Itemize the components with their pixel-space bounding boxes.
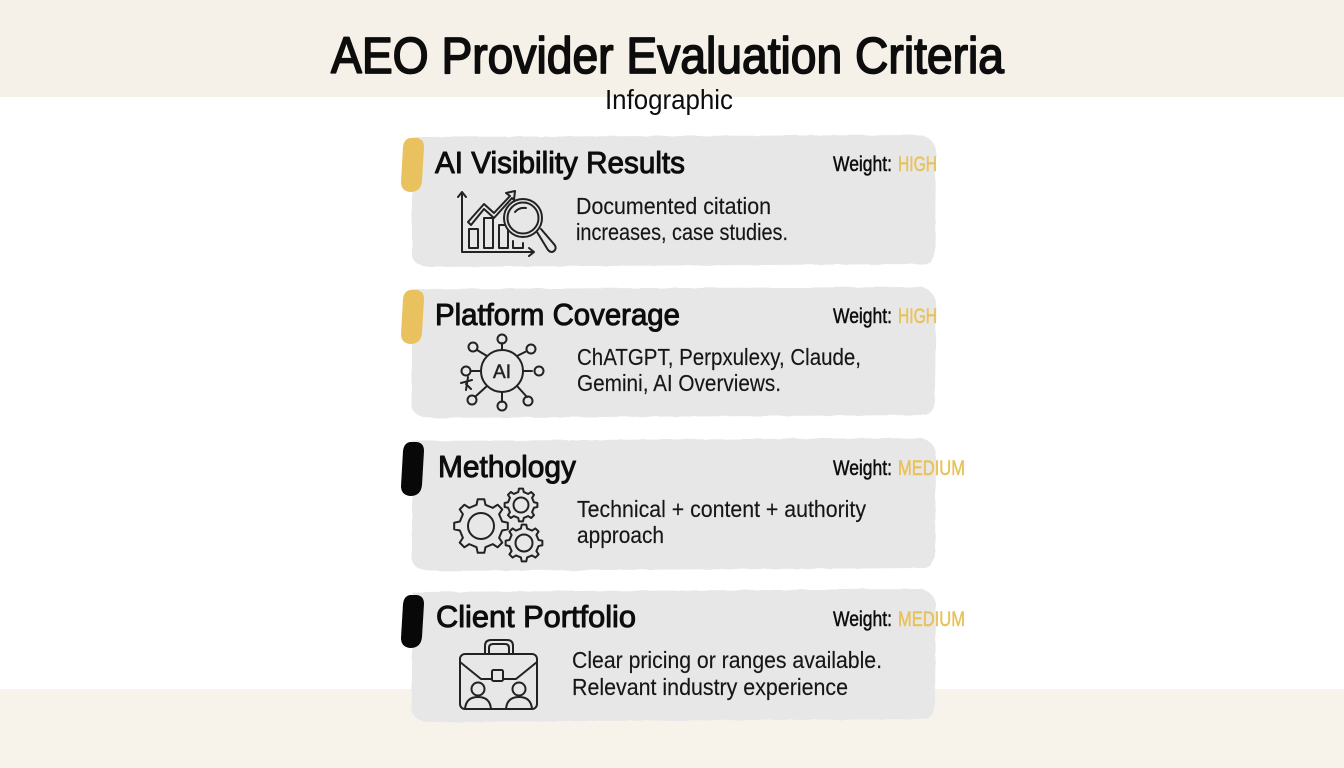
weight label: Weight: [833, 153, 892, 176]
weight value: HIGH [898, 305, 937, 328]
description: Relevant industry experience [572, 674, 848, 700]
panel: AI Visibility Results [401, 135, 937, 267]
description [577, 496, 866, 548]
footer band [0, 689, 1344, 768]
description: Clear pricing or ranges available. [572, 647, 882, 673]
priority marker: yellow [401, 138, 424, 192]
header band [0, 0, 1344, 97]
heading: Platform Coverage [435, 297, 680, 332]
icon: AI network [461, 334, 544, 410]
description: increases, case studies. [576, 219, 788, 245]
description: ChATGPT, Perpxulexy, Claude, [577, 344, 861, 370]
description [576, 193, 788, 245]
icon: briefcase with people [460, 640, 537, 709]
priority marker: black [401, 595, 424, 648]
description: Gemini, AI Overviews. [577, 370, 781, 396]
card background [412, 135, 936, 267]
description: approach [577, 522, 664, 548]
icon: gears [454, 489, 542, 561]
subtitle: Infographic [605, 84, 733, 115]
heading: Client Portfolio [436, 599, 636, 634]
panel: Methology [401, 438, 965, 571]
icon: AI network: AI [493, 362, 511, 383]
weight value: MEDIUM [898, 457, 965, 480]
description [572, 647, 882, 700]
card background [412, 589, 936, 722]
priority marker: yellow [401, 290, 424, 344]
description: Technical + content + authority [577, 496, 866, 522]
panel: Client Portfolio [401, 589, 965, 722]
weight value: HIGH [898, 153, 937, 176]
title: AEO Provider Evaluation Criteria [331, 27, 1005, 84]
panel: Platform Coverage [401, 287, 937, 418]
weight value: MEDIUM [898, 608, 965, 631]
description: Documented citation [576, 193, 771, 219]
heading: AI Visibility Results [435, 145, 685, 180]
card background [412, 438, 936, 571]
icon: chart with magnifier [458, 191, 556, 256]
weight label: Weight: [833, 608, 892, 631]
weight label: Weight: [833, 457, 892, 480]
card background [412, 287, 936, 418]
priority marker: black [401, 442, 424, 496]
description [577, 344, 861, 396]
heading: Methology [438, 449, 576, 484]
weight label: Weight: [833, 305, 892, 328]
